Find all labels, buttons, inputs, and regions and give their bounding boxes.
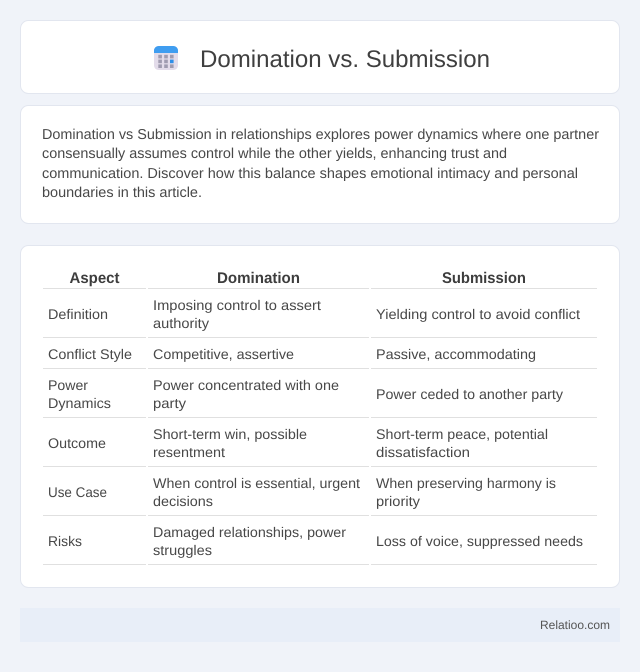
row: conflict style xyxy=(48,346,536,362)
text block: introduction paragraph xyxy=(42,127,599,201)
row: use case: When control is essential, urgent xyxy=(153,475,360,491)
row: outcome: Short-term win, possible xyxy=(153,426,307,442)
title: Domination vs. Submission xyxy=(200,46,490,73)
panel: title card xyxy=(20,20,620,94)
row: power dynamics: party xyxy=(153,395,186,411)
row: risks xyxy=(48,524,583,558)
row: risks: Damaged relationships, power xyxy=(153,524,346,540)
row: power dynamics: Dynamics xyxy=(48,395,111,411)
row: use case: priority xyxy=(376,493,420,509)
row: outcome xyxy=(48,426,548,460)
row: definition: Definition xyxy=(48,306,108,322)
row: use case: decisions xyxy=(153,493,213,509)
row: definition: authority xyxy=(153,315,209,331)
row: conflict style: Passive, accommodating xyxy=(376,346,536,362)
row: use case xyxy=(48,475,556,509)
row: power dynamics: Power concentrated with one xyxy=(153,377,339,393)
text block: introduction paragraph: consensually assumes control while the other yields, enhancing trust and xyxy=(42,146,507,162)
row: conflict style: Conflict Style xyxy=(48,346,132,362)
row: definition xyxy=(48,297,580,331)
panel: comparison table xyxy=(20,246,620,588)
table header row xyxy=(70,270,526,287)
row: definition: Imposing control to assert xyxy=(153,297,321,313)
icon: calendar xyxy=(154,46,178,70)
row: definition: Yielding control to avoid conflict xyxy=(376,306,580,322)
text block: introduction paragraph: communication. Discover how this balance shapes emotional intimacy and personal xyxy=(42,166,578,182)
panel: introduction xyxy=(20,106,620,224)
row: use case: Use Case xyxy=(48,484,107,500)
row: conflict style: Competitive, assertive xyxy=(153,346,294,362)
row: power dynamics xyxy=(48,377,563,411)
row: risks: Loss of voice, suppressed needs xyxy=(376,533,583,549)
footer bar xyxy=(20,608,620,642)
row: outcome: Short-term peace, potential xyxy=(376,426,548,442)
footer text: Relatioo.com xyxy=(540,618,610,632)
row: use case: When preserving harmony is xyxy=(376,475,556,491)
row: outcome: resentment xyxy=(153,444,225,460)
row: power dynamics: Power ceded to another party xyxy=(376,386,563,402)
row: risks: struggles xyxy=(153,542,212,558)
table header row: Domination xyxy=(217,270,300,287)
table header row: Submission xyxy=(442,270,526,287)
table header row: Aspect xyxy=(70,270,120,287)
row: power dynamics: Power xyxy=(48,377,88,393)
text block: introduction paragraph: boundaries in this article. xyxy=(42,185,202,201)
row: outcome: Outcome xyxy=(48,435,106,451)
row: risks: Risks xyxy=(48,533,82,549)
row: outcome: dissatisfaction xyxy=(376,444,470,460)
text block: introduction paragraph: Domination vs Submission in relationships explores power dynamics where one partner xyxy=(42,127,599,143)
